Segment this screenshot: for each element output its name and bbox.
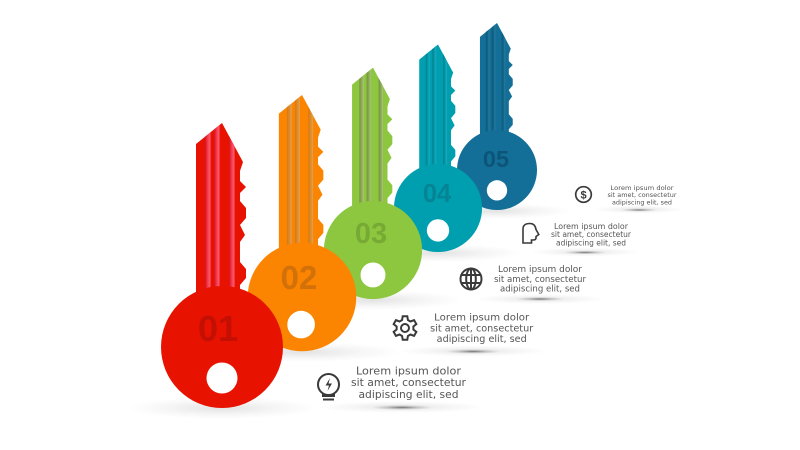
key 04 xyxy=(394,44,482,252)
item 1: text xyxy=(351,366,467,401)
item 2: text: sit amet, consectetur xyxy=(430,324,533,334)
item 2: text: adipiscing elit, sed xyxy=(437,334,527,345)
item 3: text: adipiscing elit, sed xyxy=(500,284,580,294)
item 1: shadow xyxy=(317,401,487,413)
item 5: shadow xyxy=(594,206,684,214)
item 2: shadow xyxy=(398,346,548,356)
item 2: text: Lorem ipsum dolor xyxy=(434,312,529,324)
number 03: 03 xyxy=(355,218,387,250)
item 4: head profile icon xyxy=(523,224,539,243)
item 3: text: sit amet, consectetur xyxy=(494,275,587,285)
item 4: text xyxy=(551,222,632,248)
item 4: text: sit amet, consectetur xyxy=(551,230,632,239)
item 4: shadow xyxy=(530,248,640,256)
item 2: gear icon xyxy=(394,316,416,340)
number 04: 04 xyxy=(423,180,452,208)
item 1: bulb icon xyxy=(318,374,339,400)
number 05: 05 xyxy=(483,146,509,172)
item 5: text xyxy=(608,184,677,206)
item 5: text: sit amet, consectetur xyxy=(608,191,677,199)
item 3: text: Lorem ipsum dolor xyxy=(498,265,583,275)
number 01: 01 xyxy=(198,308,238,349)
key 02 xyxy=(248,95,356,351)
item 2: text xyxy=(430,312,533,345)
number 02: 02 xyxy=(281,259,317,296)
item 4: text: Lorem ipsum dolor xyxy=(554,222,629,231)
item 1: text: adipiscing elit, sed xyxy=(358,389,458,401)
key 05 xyxy=(457,23,537,210)
item 3: shadow xyxy=(475,294,605,304)
item 1: text: Lorem ipsum dolor xyxy=(356,366,462,378)
key 01 xyxy=(161,123,283,408)
key 03 xyxy=(324,68,422,299)
item 5: dollar icon xyxy=(576,187,591,202)
item 3: text xyxy=(494,265,587,294)
item 4: text: adipiscing elit, sed xyxy=(556,238,626,248)
key shadows xyxy=(127,203,572,419)
item 5: dollar icon: $ xyxy=(580,190,587,202)
item 5: text: adipiscing elit, sed xyxy=(612,198,672,206)
item 1: text: sit amet, consectetur xyxy=(351,377,467,389)
item 5: text: Lorem ipsum dolor xyxy=(610,184,674,192)
item 3: globe icon xyxy=(460,268,482,290)
